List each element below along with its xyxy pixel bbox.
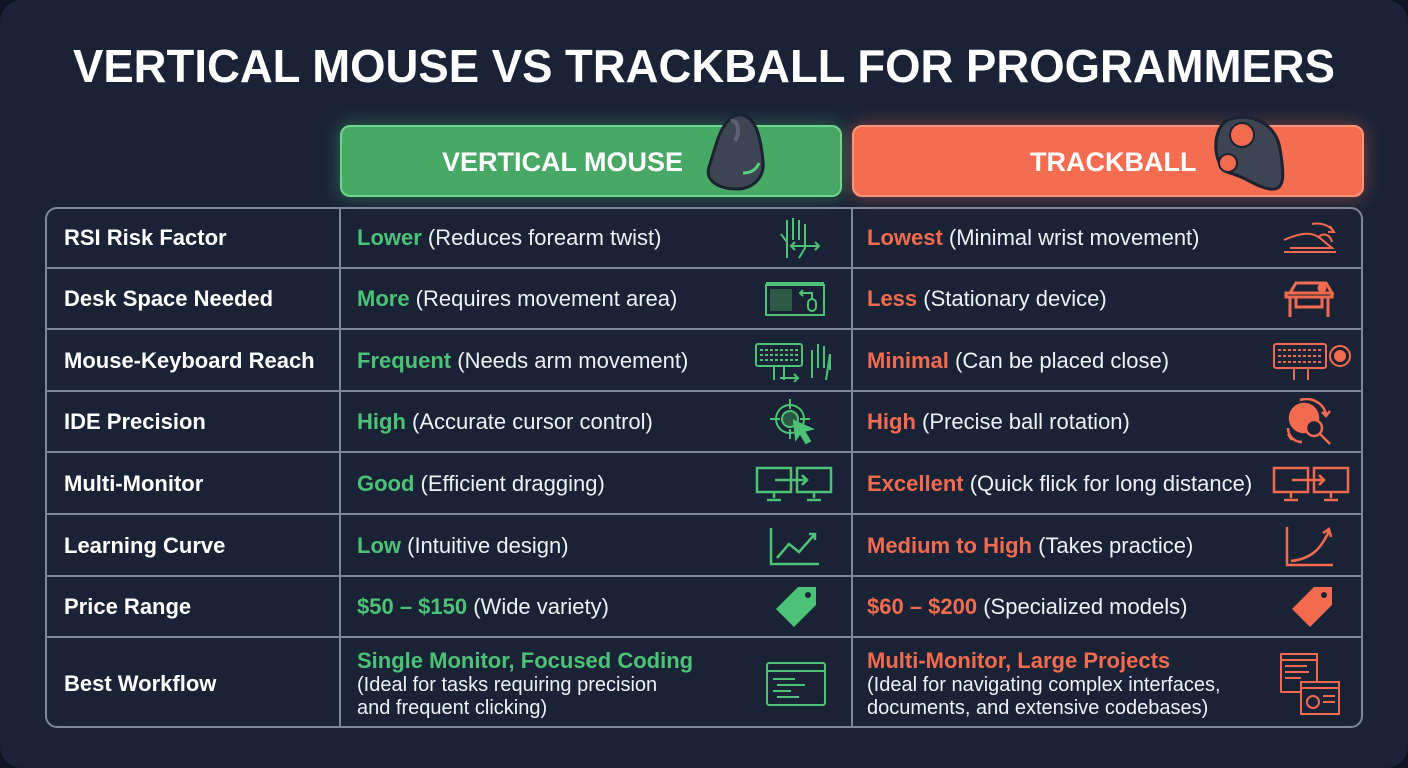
icon: monitors green [756, 466, 832, 502]
icon: wrist on trackball [1284, 222, 1336, 253]
icon: table [1284, 282, 1335, 317]
row: RSI: RSI Risk Factor [64, 225, 227, 250]
row: reach: Frequent (Needs arm movement) [357, 348, 688, 373]
icon: vertical mouse [706, 114, 765, 190]
row: reach: Minimal (Can be placed close) [867, 348, 1169, 373]
icon: keyboard hand [755, 343, 831, 382]
row: workflow: (Ideal for tasks requiring precision [357, 674, 657, 696]
icon: crosshair cursor [770, 399, 815, 444]
icon: trackball [1214, 116, 1284, 191]
header: vertical mouse: VERTICAL MOUSE [442, 147, 683, 177]
row: precision: High (Precise ball rotation) [867, 409, 1130, 434]
row: workflow: Multi-Monitor, Large Projects [867, 648, 1170, 673]
icon: keyboard trackball [1273, 343, 1351, 380]
table [45, 207, 1363, 728]
row: multi-monitor: Good (Efficient dragging) [357, 471, 605, 496]
row: RSI: Lowest (Minimal wrist movement) [867, 225, 1200, 250]
row: precision: High (Accurate cursor control) [357, 409, 653, 434]
row: price: $60 – $200 (Specialized models) [867, 594, 1187, 619]
row: desk: Less (Stationary device) [867, 286, 1107, 311]
icon: monitors orange [1272, 466, 1350, 502]
row: learning: Low (Intuitive design) [357, 533, 569, 558]
header: trackball: TRACKBALL [1030, 147, 1196, 177]
icon: tag green [776, 587, 816, 627]
title: VERTICAL MOUSE VS TRACKBALL FOR PROGRAMMERS [73, 40, 1335, 92]
icon: ball magnifier [1286, 398, 1331, 445]
header: vertical mouse [340, 125, 842, 197]
icon: documents [1280, 653, 1340, 715]
icon: code window [766, 662, 826, 706]
row: desk: More (Requires movement area) [357, 286, 677, 311]
row: reach: Mouse-Keyboard Reach [64, 348, 315, 373]
row: multi-monitor: Excellent (Quick flick for long distance) [867, 471, 1252, 496]
row: learning: Medium to High (Takes practice) [867, 533, 1193, 558]
icon: tag orange [1292, 587, 1332, 627]
row: price: $50 – $150 (Wide variety) [357, 594, 609, 619]
icon: curve [1286, 527, 1333, 566]
row: multi-monitor: Multi-Monitor [64, 471, 203, 496]
icon: line chart [770, 528, 819, 566]
row: workflow: Single Monitor, Focused Coding [357, 648, 693, 673]
row: RSI: Lower (Reduces forearm twist) [357, 225, 661, 250]
row: workflow: and frequent clicking) [357, 697, 547, 719]
row: learning: Learning Curve [64, 533, 225, 558]
icon: hand arrows [780, 218, 820, 258]
row: workflow: Best Workflow [64, 671, 216, 696]
row: workflow: documents, and extensive codebases) [867, 697, 1208, 719]
row: price: Price Range [64, 594, 191, 619]
row: workflow: (Ideal for navigating complex interfaces, [867, 674, 1221, 696]
row: desk: Desk Space Needed [64, 286, 273, 311]
icon: desk area [765, 282, 825, 316]
row: precision: IDE Precision [64, 409, 206, 434]
header: trackball [852, 125, 1364, 197]
